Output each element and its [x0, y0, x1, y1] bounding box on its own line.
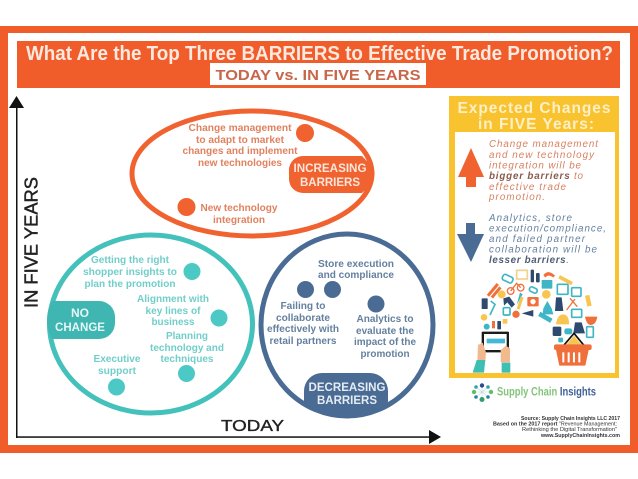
source note: Based on the 2017 report "Revenue Management:: [493, 422, 617, 428]
text: bigger barriers: effective trade: [489, 182, 567, 193]
marker: failing to collaborate: effectively with: [267, 324, 339, 335]
source note: Rethinking the Digital Transformation": [522, 427, 617, 433]
marker: planning technology: Planning: [166, 331, 208, 342]
text: bigger barriers: promotion.: [488, 192, 545, 203]
source note: [493, 416, 620, 439]
increasing label: INCREASING: [294, 161, 366, 175]
subtitle: TODAY vs. IN FIVE YEARS: [216, 67, 420, 84]
vertical axis arrow: [9, 96, 24, 438]
marker: planning technology: techniques: [160, 354, 214, 365]
marker: analytics: impact of the: [354, 337, 416, 348]
marker: change management: Change management: [188, 123, 292, 134]
icon: down arrow: [457, 223, 484, 262]
panel: increasing barriers: [132, 111, 374, 236]
marker: analytics: evaluate the: [356, 326, 414, 337]
axis label: today: TODAY: [221, 418, 284, 435]
logo wordmark: Supply Chain Insights: [497, 386, 596, 398]
marker: shopper insights: plan the promotion: [84, 279, 176, 290]
marker: alignment: business: [152, 317, 195, 328]
marker: planning technology: [150, 331, 224, 382]
store execution text: [318, 259, 394, 281]
panel heading: Expected Changes: [458, 100, 610, 117]
icon: up arrow: [458, 148, 484, 187]
logo mark: [472, 383, 493, 402]
text: bigger barriers: [488, 139, 599, 203]
marker: failing to collaborate: Failing to: [280, 301, 326, 312]
marker: new technology integration: integration: [213, 215, 265, 226]
source note: www.SupplyChainInsights.com: [540, 433, 620, 439]
marker: executive support: [94, 354, 141, 396]
marker: shopper insights: Getting the right: [91, 255, 170, 266]
increasing label: [289, 156, 374, 193]
text: lesser barriers: lesser barriers.: [489, 255, 569, 266]
marker: analytics: promotion: [360, 349, 410, 360]
horizontal axis arrow: [16, 430, 441, 444]
text: bigger barriers: Change management: [489, 139, 599, 150]
title: What Are the Top Three BARRIERS to Effective Trade Promotion?: [26, 43, 613, 65]
panel heading: in FIVE Years:: [478, 116, 594, 133]
text: lesser barriers: Analytics, store: [488, 213, 573, 224]
marker: failing to collaborate: collaborate: [276, 313, 330, 324]
panel: expected changes: [449, 96, 619, 378]
text: lesser barriers: collaboration will be: [489, 244, 598, 256]
marker: alignment: Alignment with: [137, 294, 209, 305]
text: bigger barriers: and new technology: [489, 150, 595, 161]
marker: change management: to adapt to market: [196, 135, 285, 146]
marker: change management: changes and implement: [182, 146, 298, 157]
title banner: [17, 41, 620, 88]
marker: new technology integration: New technology: [200, 203, 278, 214]
marker: shopper insights: [83, 255, 200, 290]
marker: change management: [182, 123, 314, 169]
source note: Source: Supply Chain Insights LLC 2017: [521, 416, 620, 422]
text: bigger barriers: integration will be: [489, 160, 582, 172]
panel: no change: [47, 235, 252, 413]
text: lesser barriers: and failed partner: [489, 234, 586, 245]
decreasing label: [304, 373, 388, 418]
no change label: NO: [71, 306, 89, 320]
marker: analytics: [354, 296, 416, 360]
no change label: [47, 301, 115, 339]
increasing label: BARRIERS: [300, 175, 360, 189]
panel: decreasing barriers: [261, 234, 433, 418]
marker: new technology integration: [178, 198, 278, 226]
icon: shopping basket: [554, 333, 592, 366]
marker: failing to collaborate: [267, 281, 339, 347]
illustration: shopping icons to basket: [473, 270, 597, 373]
marker: alignment: key lines of: [146, 306, 201, 317]
marker: analytics: Analytics to: [356, 314, 414, 325]
store execution text: Store execution: [318, 259, 394, 270]
subtitle: [210, 63, 426, 85]
no change label: CHANGE: [55, 320, 105, 334]
marker: alignment: [137, 294, 228, 328]
logo: supply chain insights: [472, 383, 596, 402]
text: bigger barriers: bigger barriers to: [489, 171, 584, 182]
icon: tablet and hands: [473, 332, 510, 373]
marker: change management: new technologies: [198, 158, 282, 169]
panel heading: [458, 100, 610, 133]
marker: failing to collaborate: retail partners: [270, 336, 337, 347]
text: lesser barriers: [488, 213, 606, 266]
marker: executive support: Executive: [94, 354, 141, 365]
marker: store execution: [324, 281, 341, 298]
text: lesser barriers: execution/compliance,: [489, 224, 606, 234]
marker: executive support: support: [98, 366, 137, 377]
marker: shopper insights: shopper insights to: [83, 267, 177, 278]
decreasing label: BARRIERS: [317, 393, 377, 407]
store execution text: and compliance: [318, 270, 394, 281]
decreasing label: DECREASING: [308, 380, 386, 394]
marker: planning technology: technology and: [150, 343, 224, 354]
axis label: in five years: IN FIVE YEARS: [21, 177, 42, 308]
